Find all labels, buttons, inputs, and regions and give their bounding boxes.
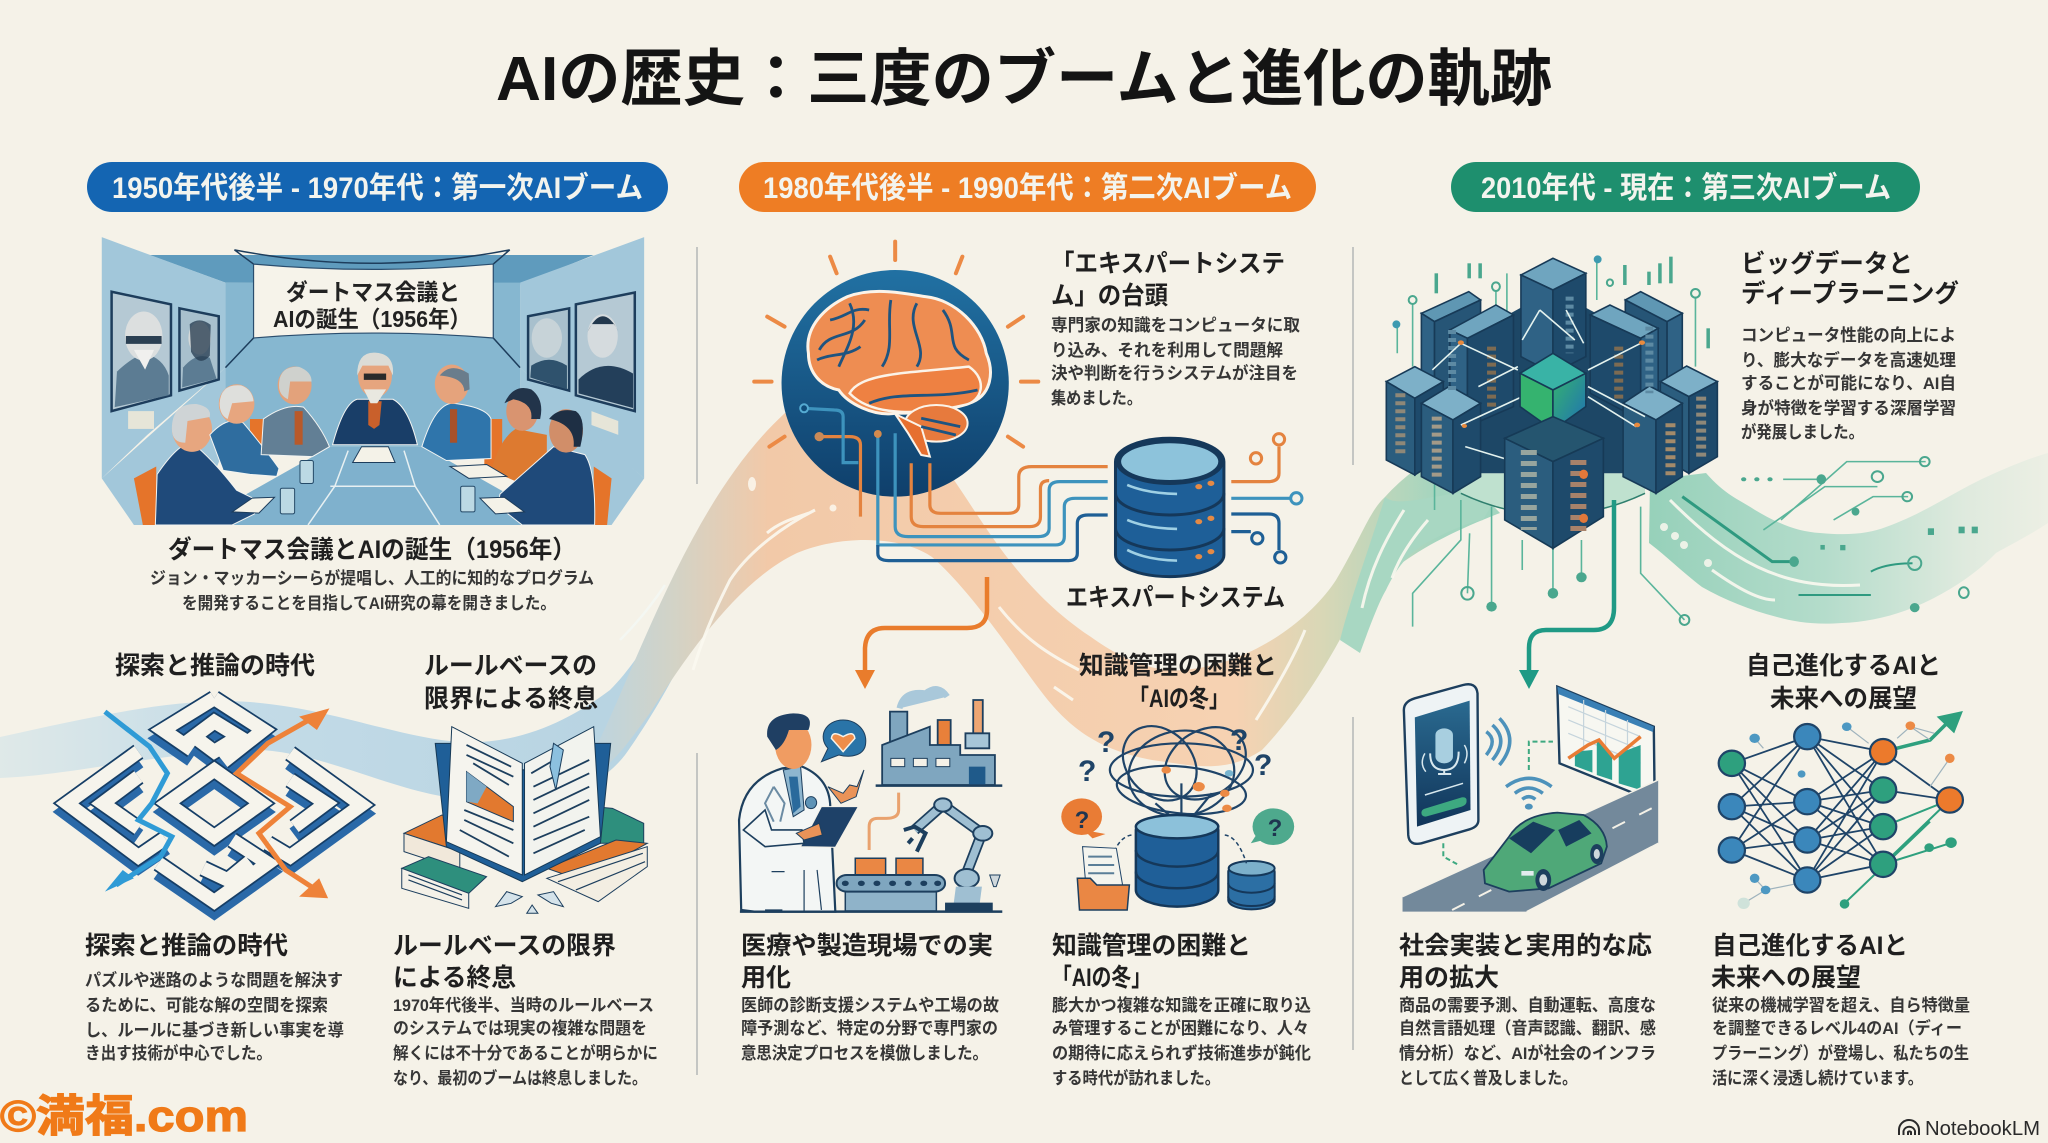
icon: tangled knowledge and database: ? (1268, 815, 1282, 842)
text block: AI winter: 知識管理の困難と (1052, 932, 1251, 960)
icon: isometric maze with arrows (67, 698, 362, 910)
title: AIの歴史：三度のブームと進化の軌跡 (496, 45, 1552, 114)
text block: rise of expert systems: 集めました。 (1051, 389, 1142, 408)
panel: second AI boom (739, 162, 1316, 1088)
text block: end of the first boom: なり、最初のブームは終息しました。 (393, 1068, 647, 1088)
text block: future outlook: を調整できるレベル4のAI（ディー (1712, 1018, 1962, 1038)
panel: third AI boom (1386, 162, 1978, 1088)
text block: search and inference: るために、可能な解の空間を探索 (85, 995, 328, 1015)
icon: tangled knowledge and database: ? (1075, 807, 1089, 834)
icon: tangled knowledge and database: ? (1078, 755, 1096, 788)
caption: Dartmouth conference: ダートマス会議とAIの誕生（1956年） (168, 535, 576, 564)
text block: social implementation: として広く普及しました。 (1399, 1068, 1577, 1088)
text block: AI winter: み管理することが困難になり、人々 (1052, 1018, 1309, 1038)
text block: social implementation (1399, 932, 1656, 1088)
flowing timeline ribbons (0, 405, 2048, 802)
text block: future outlook: 未来への展望 (1711, 964, 1861, 992)
icon: tangled knowledge and database (1061, 716, 1294, 910)
heading: knowledge management difficulty: 「AIの冬」 (1129, 685, 1229, 713)
era pill: third boom (1451, 162, 1920, 212)
text block: big data and deep learning: ディープラーニング (1741, 279, 1959, 308)
era pill: third boom: 2010年代 - 現在：第三次AIブーム (1481, 171, 1891, 205)
era pill: second boom (739, 162, 1316, 212)
text block: rise of expert systems: ム」の台頭 (1051, 282, 1168, 310)
text block: end of the first boom: のシステムでは現実の複雑な問題を (393, 1018, 647, 1038)
text block: end of the first boom: による終息 (393, 963, 516, 992)
icon: tangled knowledge and database: ? (1230, 724, 1248, 757)
text block: rise of expert systems: 「エキスパートシステ (1051, 250, 1285, 278)
icon: glowing brain and expert-system database (754, 242, 1302, 577)
heading: self-evolving AI: 未来への展望 (1770, 685, 1917, 713)
text block: AI winter: の期待に応えられず技術進歩が鈍化 (1052, 1043, 1311, 1063)
text block: search and inference: し、ルールに基づき新しい事実を導 (85, 1021, 344, 1040)
watermark: ©満福.com (0, 1092, 248, 1141)
heading: search and inference: 探索と推論の時代 (115, 652, 315, 680)
illustration: Dartmouth conference room: ダートマス会議と (286, 279, 460, 305)
text block: big data and deep learning (1741, 249, 1959, 442)
text block: end of the first boom: 解くには不十分であることが明らかに (393, 1043, 658, 1063)
arrow: expert systems to applications (855, 577, 987, 689)
text block: rise of expert systems (1051, 250, 1300, 408)
illustration: Dartmouth conference room (102, 237, 644, 525)
era pill: first boom: 1950年代後半 - 1970年代：第一次AIブーム (112, 171, 643, 205)
heading: rule-based limit: 限界による終息 (424, 684, 598, 713)
text block: future outlook: 活に深く浸透し続けています。 (1712, 1069, 1923, 1088)
text block: social implementation: 用の拡大 (1399, 964, 1499, 992)
text block: practical use in medicine and manufacturing: 医師の診断支援システムや工場の故 (741, 995, 999, 1015)
text block: big data and deep learning: り、膨大なデータを高速処理 (1741, 350, 1956, 370)
text block: AI winter (1052, 932, 1311, 1088)
text block: social implementation: 情分析）など、AIが社会のインフラ (1399, 1043, 1656, 1063)
text block: practical use in medicine and manufacturing: 医療や製造現場での実 (741, 932, 993, 960)
text block: big data and deep learning: することが可能になり、AI自 (1741, 373, 1956, 393)
text block: end of the first boom: 1970年代後半、当時のルールベース (393, 995, 654, 1015)
caption: Dartmouth conference: ジョン・マッカーシーらが提唱し、人工的に知的なプログラム (150, 568, 594, 588)
divider lines (697, 247, 1353, 1075)
heading: rule-based limit: ルールベースの (424, 652, 597, 680)
icon: open book on a book stack (402, 727, 647, 913)
label: expert system: エキスパートシステム (1066, 584, 1285, 612)
text block: practical use in medicine and manufacturing: 用化 (741, 964, 791, 992)
illustration: Dartmouth conference room: AIの誕生（1956年） (273, 306, 471, 332)
text block: search and inference (85, 932, 344, 1063)
heading: knowledge management difficulty (1079, 652, 1277, 713)
text block: rise of expert systems: り込み、それを利用して問題解 (1051, 341, 1283, 360)
text block: rise of expert systems: 決や判断を行うシステムが注目を (1051, 363, 1298, 383)
panel: first AI boom (67, 162, 668, 1088)
text block: big data and deep learning: コンピュータ性能の向上によ (1741, 325, 1956, 345)
era pill: first boom (87, 162, 668, 212)
heading: self-evolving AI (1746, 652, 1941, 713)
text block: social implementation: 商品の需要予測、自動運転、高度な (1399, 995, 1656, 1015)
NotebookLM logo: NotebookLM (1925, 1118, 2040, 1140)
text block: future outlook: 自己進化するAIと (1712, 932, 1908, 960)
text block: future outlook (1711, 932, 1970, 1088)
text block: search and inference: 探索と推論の時代 (85, 932, 288, 960)
text block: AI winter: する時代が訪れました。 (1052, 1068, 1220, 1088)
text block: practical use in medicine and manufacturing: 意思決定プロセスを模倣しました。 (741, 1044, 988, 1063)
text block: end of the first boom: ルールベースの限界 (393, 932, 616, 960)
text block: big data and deep learning: 身が特徴を学習する深層学習 (1741, 398, 1956, 418)
caption: Dartmouth conference: を開発することを目指してAI研究の幕を開きました。 (182, 594, 556, 613)
text block: practical use in medicine and manufacturing: 障予測など、特定の分野で専門家の (741, 1018, 998, 1038)
icon: phone, chart and self-driving car (1403, 684, 1658, 912)
text block: search and inference: パズルや迷路のような問題を解決す (85, 970, 343, 990)
heading: self-evolving AI: 自己進化するAIと (1746, 652, 1941, 680)
icon: tangled knowledge and database: ? (1097, 726, 1115, 759)
icon: doctor, factory and robot arm (739, 689, 1002, 912)
text block: AI winter: 「AIの冬」 (1052, 964, 1151, 992)
text block: big data and deep learning: が発展しました。 (1741, 422, 1864, 442)
heading: rule-based limit (424, 652, 598, 713)
text block: social implementation: 自然言語処理（音声認識、翻訳、感 (1399, 1018, 1656, 1038)
icon: neural network (1719, 711, 1963, 909)
text block: search and inference: き出す技術が中心でした。 (85, 1043, 272, 1063)
text block: big data and deep learning: ビッグデータと (1741, 249, 1913, 278)
text block: rise of expert systems: 専門家の知識をコンピュータに取 (1051, 315, 1300, 335)
caption: Dartmouth conference (150, 535, 594, 613)
text block: AI winter: 膨大かつ複雑な知識を正確に取り込 (1052, 995, 1311, 1015)
text block: future outlook: プラーニング）が登場し、私たちの生 (1712, 1043, 1969, 1063)
text block: end of the first boom (393, 932, 658, 1088)
heading: knowledge management difficulty: 知識管理の困難と (1079, 652, 1277, 680)
text block: future outlook: 従来の機械学習を超え、自ら特徴量 (1712, 995, 1970, 1015)
arrow: deep learning to applications (1519, 500, 1614, 689)
era pill: second boom: 1980年代後半 - 1990年代：第二次AIブーム (763, 171, 1292, 205)
text block: practical use in medicine and manufacturing (741, 932, 999, 1063)
text block: social implementation: 社会実装と実用的な応 (1399, 932, 1652, 960)
icon: tangled knowledge and database: ? (1254, 749, 1272, 782)
icon: isometric data-center servers (1386, 255, 1978, 627)
